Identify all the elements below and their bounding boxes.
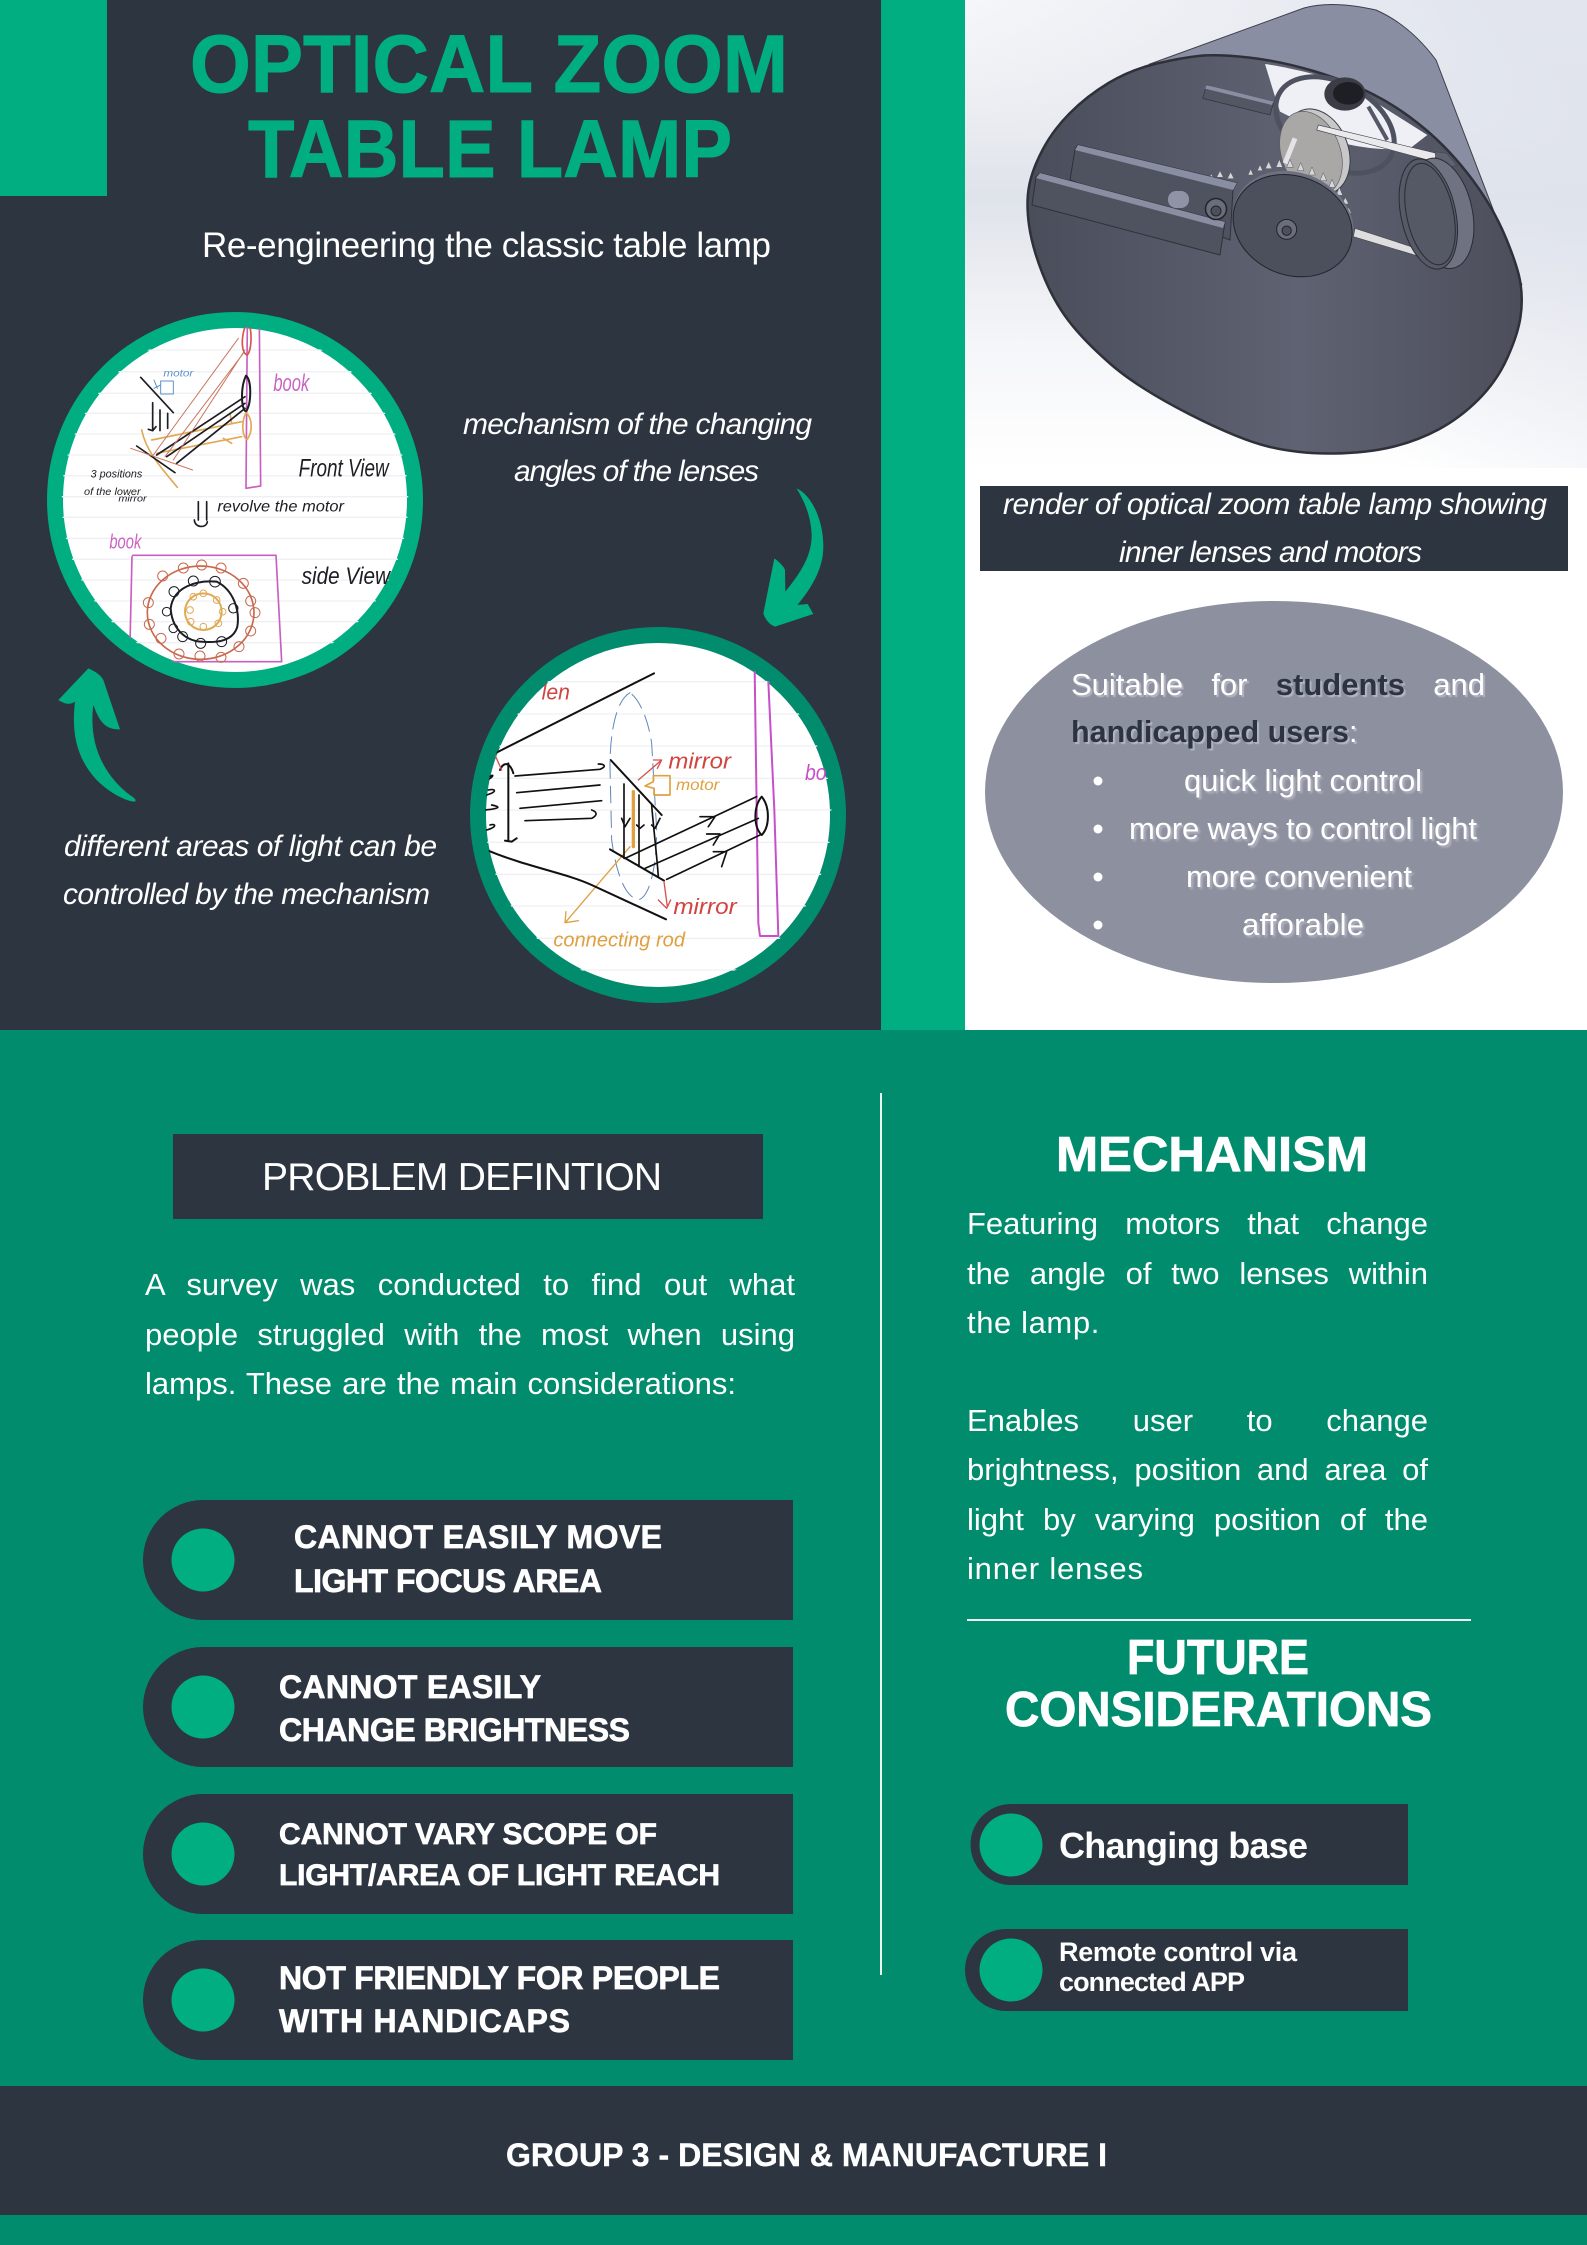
wheel nut — [1277, 219, 1297, 239]
gear back rim and disc — [1269, 99, 1361, 204]
lower bracket — [1032, 173, 1225, 255]
text block: mechanism paragraph one: Featuring motors that change — [967, 1206, 1428, 1241]
pill: remote control: connected APP — [1059, 1967, 1245, 1997]
panel: white right column — [965, 0, 1587, 1030]
text block: mechanism paragraph one: the lamp. — [967, 1305, 1100, 1340]
arrow: curved down to lower sketch — [763, 488, 823, 627]
sketch circle: lens side view: bo — [805, 760, 827, 785]
pill: not friendly: WITH HANDICAPS — [279, 2003, 570, 2039]
title: OPTICAL ZOOM — [190, 19, 788, 110]
bullet list: afforable — [1242, 907, 1364, 942]
arrow: curved up to upper sketch — [58, 668, 136, 802]
footer bar: GROUP 3 - DESIGN & MANUFACTURE I — [506, 2137, 1107, 2173]
green vertical strip — [881, 0, 965, 1030]
caption: different areas of light: controlled by the mechanism — [63, 878, 430, 911]
caption: different areas of light — [63, 830, 437, 911]
ellipse panel: suitable users — [985, 601, 1563, 983]
pill: changing base — [970, 1804, 1408, 1885]
pill: cannot easily change brightness — [143, 1647, 793, 1767]
inner ring — [1259, 57, 1411, 193]
caption: mechanism of the changing angles: mechanism of the changing — [463, 408, 812, 441]
lamp outer shell — [1150, 4, 1522, 285]
panel: dark hero — [0, 0, 881, 1030]
text block: suitable for students: Suitable for students and — [1071, 667, 1485, 702]
heading: mechanism: MECHANISM — [1056, 1128, 1368, 1182]
pill: cannot vary scope — [143, 1794, 793, 1914]
text block: mechanism paragraph two: Enables user to change — [967, 1403, 1428, 1438]
subtitle: Re-engineering the classic table lamp — [202, 226, 771, 265]
green corner block — [0, 0, 107, 196]
pill: cannot vary scope: LIGHT/AREA OF LIGHT REACH — [279, 1859, 720, 1892]
pill: remote control — [965, 1929, 1408, 2011]
caption: mechanism of the changing angles: angles of the lenses — [514, 455, 759, 488]
render: optical zoom lamp — [965, 0, 1587, 468]
caption banner: render: render of optical zoom table lamp showing — [1003, 488, 1547, 521]
text block: mechanism paragraph one: the angle of two lenses within — [967, 1256, 1428, 1291]
bullet list — [1129, 763, 1477, 942]
heading: future considerations — [1005, 1631, 1432, 1737]
sketch circle: lens side view: mirror — [673, 894, 739, 919]
text block: mechanism paragraph one — [967, 1206, 1428, 1340]
gear wheel — [1217, 153, 1369, 294]
pill: not friendly: NOT FRIENDLY FOR PEOPLE — [279, 1960, 720, 1996]
lamp mechanism details — [1203, 57, 1483, 294]
upper bar — [1203, 85, 1273, 115]
heading: future considerations: FUTURE — [1127, 1631, 1309, 1685]
pill: cannot easily move — [143, 1500, 793, 1620]
small nut — [1206, 198, 1226, 220]
pill: changing base: Changing base — [1059, 1825, 1308, 1866]
sketch circle: lens side view: mirror — [668, 748, 733, 773]
heading banner: problem definition — [173, 1134, 763, 1219]
text block: mechanism paragraph two: inner lenses — [967, 1551, 1144, 1586]
caption: different areas of light: different areas of light can be — [64, 830, 437, 863]
text block: suitable for students: handicapped users: — [1071, 715, 1357, 749]
pill: cannot easily change brightness: CHANGE BRIGHTNESS — [279, 1712, 630, 1748]
bullet list: more ways to control light — [1129, 811, 1477, 846]
text block: mechanism paragraph two: brightness, position and area of — [967, 1452, 1428, 1487]
sketch circle: lens side view — [478, 635, 838, 995]
sketch circle: lens side view: motor — [676, 777, 720, 794]
heading: future considerations: CONSIDERATIONS — [1005, 1683, 1432, 1737]
lamp inner surface — [1028, 55, 1522, 454]
panel: lower green section — [0, 1030, 1587, 2245]
pill: cannot easily move: CANNOT EASILY MOVE — [294, 1519, 662, 1555]
sketch circle: front and side view: side View — [302, 563, 391, 590]
pill: remote control: Remote control via — [1059, 1937, 1298, 1967]
rods — [1317, 125, 1457, 257]
caption banner: render — [980, 486, 1568, 571]
gear teeth — [1209, 159, 1353, 221]
sketch circle: front and side view: 3 positions — [91, 469, 143, 481]
sketch circle: front and side view: book — [109, 530, 143, 553]
sketch circle: front and side view: motor — [163, 369, 194, 380]
pill: cannot vary scope: CANNOT VARY SCOPE OF — [279, 1818, 657, 1851]
text block: mechanism paragraph two — [967, 1403, 1428, 1586]
sketch circle: lens side view: connecting rod — [553, 929, 686, 952]
sketch circle: front and side view: book — [273, 370, 310, 397]
title — [190, 19, 788, 195]
text block: suitable for students — [1071, 667, 1486, 751]
sketch circle: lens side view: len — [542, 679, 570, 704]
pill: cannot easily change brightness: CANNOT EASILY — [279, 1669, 541, 1705]
text block: mechanism paragraph two: light by varying position of the — [967, 1502, 1428, 1537]
sketch circle: front and side view: mirror — [118, 493, 148, 503]
sketch circle: front and side view: revolve the motor — [217, 499, 345, 516]
bullet list: more convenient — [1186, 859, 1412, 894]
caption: mechanism of the changing angles — [463, 408, 812, 488]
cylinder stub — [1168, 191, 1189, 208]
footer bar — [0, 2086, 1587, 2215]
back opening — [1265, 64, 1427, 149]
pill: not friendly — [143, 1940, 793, 2060]
bullet dots — [1094, 776, 1102, 930]
text block: problem paragraph — [145, 1267, 795, 1401]
upper bracket — [1070, 145, 1237, 240]
pill: cannot easily move: LIGHT FOCUS AREA — [294, 1563, 602, 1599]
sketch circle: front and side view — [50, 320, 417, 680]
text block: problem paragraph: A survey was conducted to find out what — [145, 1267, 795, 1302]
threaded socket — [1324, 77, 1387, 140]
sketch circle: front and side view: of the lower — [84, 487, 141, 498]
heading banner: problem definition: PROBLEM DEFINTION — [262, 1156, 662, 1199]
title: TABLE LAMP — [248, 104, 732, 195]
lens — [1390, 152, 1483, 274]
sketch circle: front and side view: Front View — [299, 455, 390, 483]
text block: problem paragraph: lamps. These are the main considerations: — [145, 1366, 736, 1401]
caption banner: render: inner lenses and motors — [1119, 536, 1422, 569]
text block: problem paragraph: people struggled with the most when using — [145, 1317, 795, 1352]
bullet list: quick light control — [1184, 763, 1422, 798]
